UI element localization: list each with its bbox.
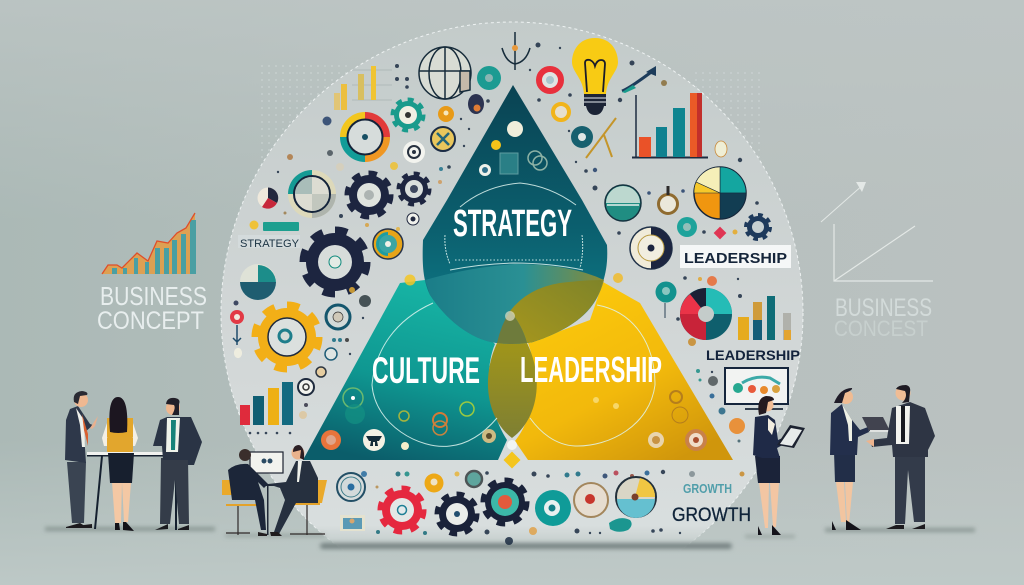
monitor [250, 452, 283, 473]
icon: teal pin [656, 282, 676, 318]
icon: gauge [288, 170, 336, 218]
right heading: business: BUSINESS [835, 294, 932, 322]
icon: white target [403, 141, 425, 163]
icon: pie gauge [240, 264, 276, 300]
icon: growth arrow [622, 66, 656, 93]
label: leadership white box [680, 245, 791, 268]
icon: green sphere [605, 185, 641, 221]
label: leadership white box: LEADERSHIP [684, 250, 787, 267]
bar chart: top right [632, 93, 708, 158]
icon: dark pin [468, 94, 484, 114]
label: growth faded: GROWTH [683, 481, 732, 496]
icon: dial [630, 227, 672, 269]
strategy region [423, 85, 607, 344]
icon: yellow ring [553, 104, 569, 120]
icon: small pie [258, 188, 278, 209]
icon: teal donut right [677, 217, 697, 237]
person: seated woman [268, 445, 318, 536]
icon: presentation monitor [725, 368, 788, 410]
icon: small dark gear [400, 175, 428, 203]
pie chart: top right [694, 167, 746, 219]
icon: globe [419, 47, 471, 99]
icon: teal sphere [571, 126, 593, 148]
person: man left [65, 391, 98, 528]
chair left [222, 480, 260, 535]
icon: large dark gear [306, 233, 364, 291]
icon: teal gear badge [394, 101, 422, 129]
left heading: concept: CONCEPT [97, 307, 204, 335]
halftone dots [260, 65, 760, 165]
strategy and culture overlap [425, 264, 604, 344]
centre highlight [505, 311, 515, 321]
people: seated group [222, 445, 327, 536]
bottom row icons [337, 471, 656, 532]
icon: light bulb [572, 38, 618, 115]
table [266, 484, 308, 535]
person: man right [153, 398, 202, 530]
central disc [221, 22, 803, 585]
label: strategy: STRATEGY [240, 238, 300, 250]
icon: badge [431, 127, 455, 151]
icon: pencil tools [586, 118, 616, 158]
scattered dots [234, 42, 759, 545]
title: leadership: LEADERSHIP [520, 349, 662, 390]
icon: yellow badge [424, 474, 444, 492]
tablet [862, 417, 891, 432]
person: woman right [830, 388, 869, 530]
left heading: business: BUSINESS [100, 281, 207, 311]
icon: yellow gear [258, 308, 316, 366]
icon: compass [502, 32, 530, 70]
icon: teal bar [250, 220, 299, 231]
icon: teal ring [326, 305, 350, 329]
icon: dark gear with teal centre [485, 482, 525, 522]
icon: dark gear [349, 175, 389, 215]
leadership region [515, 282, 733, 460]
icon: navy gear [747, 216, 769, 238]
right line chart [821, 182, 933, 281]
icon: grey ring [466, 471, 482, 487]
icon: red ring [539, 69, 561, 91]
chair right [290, 480, 327, 535]
people: left standing group [65, 391, 202, 531]
right heading: concest: CONCEST [834, 316, 928, 341]
teal arc lines [372, 183, 655, 446]
icon: small rings [298, 295, 371, 395]
people: right couple [830, 385, 935, 530]
icon: orange dot [438, 106, 454, 122]
culture and leadership overlap [488, 343, 537, 438]
culture region [303, 280, 507, 460]
strategy and leadership overlap [510, 280, 603, 343]
table [87, 452, 185, 530]
icon: orange ball [729, 418, 745, 434]
pie chart: mid right [680, 288, 732, 340]
bar chart: left [240, 382, 293, 425]
icon: navy gear bottom [439, 496, 475, 532]
floor shadows [45, 527, 975, 549]
title: strategy: STRATEGY [453, 203, 572, 245]
icon: teal circle [535, 490, 571, 526]
icon: teal donut [477, 66, 501, 90]
bar chart: mid right [738, 296, 791, 340]
icon: yellow teal donut [373, 229, 403, 259]
label: growth: GROWTH [672, 505, 751, 526]
person: man right [866, 385, 935, 529]
triangle venn diagram [303, 85, 733, 460]
icon: gauge bottom [616, 477, 656, 518]
icon: red gear [382, 490, 422, 530]
label: leadership plain: LEADERSHIP [706, 347, 800, 363]
icon: red pin [230, 310, 244, 358]
icon: brown ring [574, 483, 608, 517]
person: seated man [228, 449, 268, 536]
icons inside triangle [321, 121, 707, 468]
people: woman with tablet [753, 396, 805, 535]
icon: photo [340, 515, 365, 531]
icon: colour ring [344, 116, 386, 158]
person: woman centre [102, 397, 138, 531]
triple overlap [497, 311, 527, 344]
icon: small yellow bars [334, 66, 392, 110]
icon: teal leaf [609, 518, 632, 532]
icon: red diamond [714, 227, 726, 239]
title: culture: CULTURE [372, 350, 480, 391]
icon: small ring [407, 213, 419, 225]
icon: pale pin [715, 141, 727, 157]
left arrow chart [102, 213, 196, 274]
icon: brown ring [658, 186, 678, 214]
icon: ring bottom [337, 473, 365, 501]
